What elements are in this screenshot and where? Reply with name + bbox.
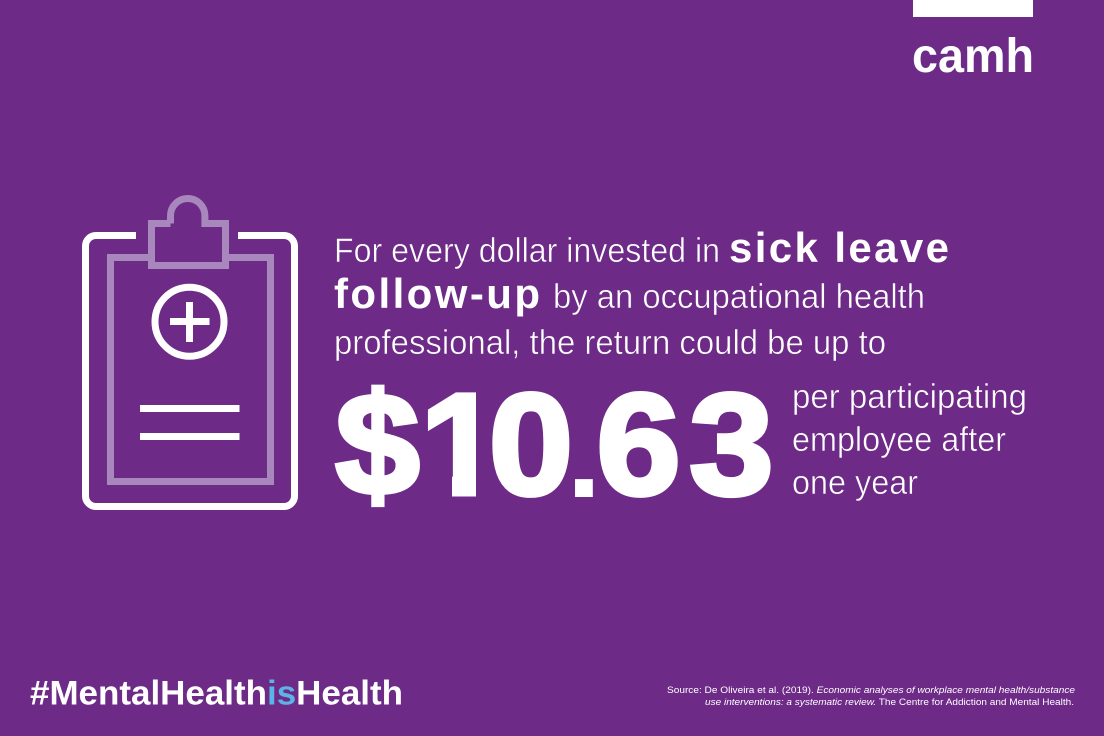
big number: $10.63: 6	[597, 364, 681, 525]
icon: clipboard with medical cross	[86, 198, 294, 506]
logo: camh	[912, 0, 1034, 83]
statement text: by an occupational health	[553, 278, 925, 316]
statement text	[334, 224, 949, 362]
per employee text	[792, 378, 1027, 502]
big number: $10.63: 1	[420, 364, 504, 525]
source citation: use interventions: a systematic review. The Centre for Addiction and Mental Health.	[705, 697, 1074, 708]
source citation: Source: De Oliveira et al. (2019). Economic analyses of workplace mental health/substance	[667, 685, 1075, 696]
big number: $10.63: $	[336, 364, 420, 525]
statement text: sick leave	[729, 224, 949, 271]
big number: $10.63: 3	[689, 364, 773, 525]
big number: $10.63: 0	[489, 364, 573, 525]
statement text: For every dollar invested in	[334, 232, 720, 270]
logo: camh: camh	[912, 30, 1034, 83]
per employee text: per participating	[792, 378, 1027, 416]
big number: $10.63: .	[567, 390, 601, 523]
statement text: follow-up	[334, 270, 540, 317]
source citation	[667, 685, 1075, 708]
per employee text: one year	[792, 464, 918, 502]
per employee text: employee after	[792, 421, 1006, 459]
hashtag: #MentalHealthisHealth	[30, 674, 403, 712]
statement text: professional, the return could be up to	[334, 324, 886, 362]
big number: $10.63	[334, 384, 771, 508]
